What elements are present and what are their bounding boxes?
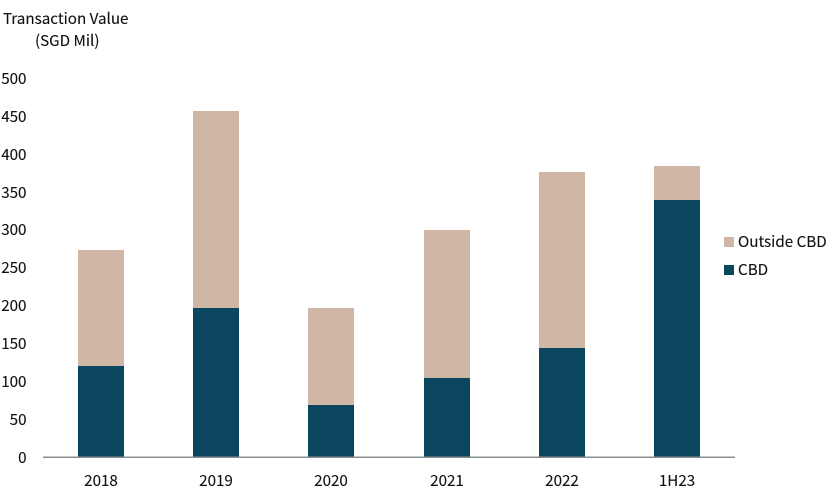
y axis labels: 250: [1, 256, 26, 278]
legend: CBD: [738, 258, 768, 280]
y axis labels: 200: [1, 294, 26, 316]
y axis labels: 100: [1, 370, 26, 392]
bars: 2019: [193, 111, 239, 457]
y axis labels: 450: [1, 105, 26, 127]
bars: 2018: [78, 250, 124, 457]
axis title: Transaction Value: [3, 7, 128, 29]
y axis labels: 150: [1, 332, 26, 354]
y axis labels: 0: [18, 446, 26, 468]
y axis labels: 500: [1, 67, 26, 89]
bars: 1H23: [654, 166, 700, 457]
y axis labels: 400: [1, 143, 26, 165]
legend: Outside CBD: [738, 230, 827, 252]
y axis labels: [1, 67, 26, 468]
y axis labels: 350: [1, 181, 26, 203]
bars: 2022: [539, 172, 585, 457]
x axis line: [43, 456, 735, 458]
bars: 2020: [308, 308, 354, 457]
axis title: [3, 7, 128, 51]
y axis labels: 300: [1, 218, 26, 240]
axis title: (SGD Mil): [35, 29, 99, 51]
legend: [724, 230, 827, 280]
bars: 2021: [424, 230, 470, 457]
x axis labels: [84, 469, 695, 490]
y axis labels: 50: [10, 408, 26, 430]
